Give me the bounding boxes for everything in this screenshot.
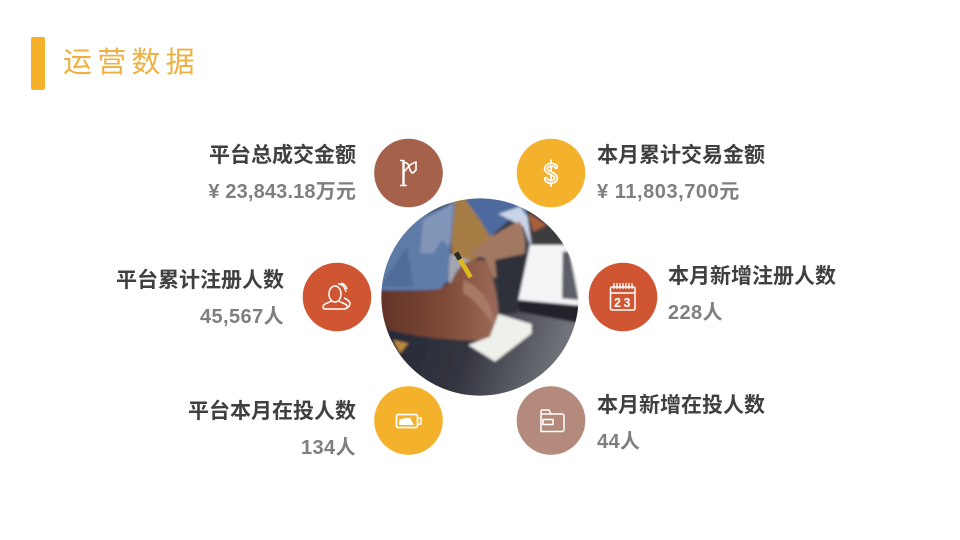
label: monthly new registered users: 本月新增注册人数 (668, 265, 836, 288)
icon: flag (400, 160, 416, 186)
central photo and icon circles (302, 138, 658, 455)
icon circle: monthly transaction amount (517, 139, 585, 207)
value: monthly transaction amount: ¥ 11,803,700元 (597, 181, 740, 203)
icon circle: total registered users (303, 263, 371, 331)
icon: dollar (546, 160, 556, 186)
value: total transaction amount: ¥ 23,843.18万元 (208, 181, 356, 203)
value: total registered users: 45,567人 (200, 306, 284, 328)
label: monthly new investors: 本月新增在投人数 (597, 394, 765, 417)
value: monthly new investors: 44人 (597, 431, 640, 453)
icon: calendar: 23 (614, 296, 633, 310)
label: monthly transaction amount: 本月累计交易金额 (597, 144, 765, 167)
photo: hand writing at desk (377, 193, 583, 400)
icon: folder (541, 410, 564, 432)
icon circle: platform monthly investors (374, 386, 443, 455)
icon circle: monthly new registered users (589, 263, 657, 331)
value: monthly new registered users: 228人 (668, 302, 723, 324)
icon: battery (396, 414, 421, 428)
label: total transaction amount: 平台总成交金额 (209, 144, 356, 167)
icon: users (323, 283, 350, 309)
title accent bar (31, 37, 45, 90)
icon circle: total transaction amount (374, 139, 443, 207)
value: platform monthly investors: 134人 (301, 437, 356, 459)
label: total registered users: 平台累计注册人数 (116, 269, 284, 292)
icon circle: monthly new investors (517, 386, 585, 455)
label: platform monthly investors: 平台本月在投人数 (188, 400, 356, 423)
title: 运营数据 (63, 47, 200, 79)
